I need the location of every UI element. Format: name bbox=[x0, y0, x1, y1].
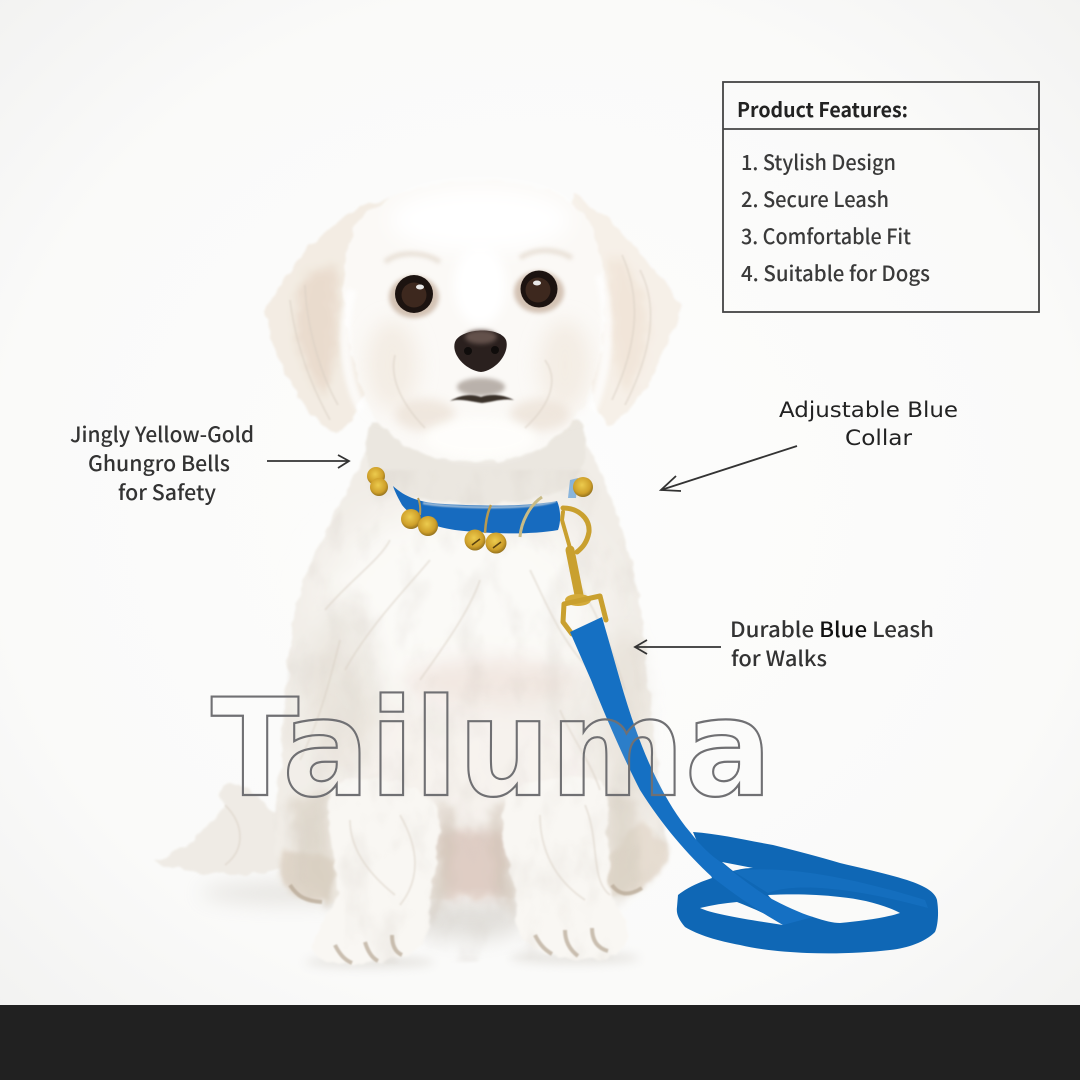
fur strokes bbox=[225, 255, 651, 905]
callout: leash bbox=[730, 614, 934, 673]
list: features: 4. Suitable for Dogs bbox=[741, 258, 930, 288]
list: features bbox=[741, 147, 930, 288]
dog tail bbox=[155, 783, 285, 875]
bells bbox=[367, 467, 593, 554]
floor shadow bbox=[200, 882, 640, 968]
list: features: 3. Comfortable Fit bbox=[741, 221, 911, 251]
list: features: 1. Stylish Design bbox=[741, 147, 896, 177]
watermark: Tailuma: Tailuma bbox=[211, 670, 772, 827]
dog hind paws bbox=[279, 850, 340, 902]
callout: leash: for Walks bbox=[731, 643, 827, 673]
panel: product features bbox=[723, 82, 1039, 312]
dog ears bbox=[265, 198, 392, 433]
dog neck bbox=[366, 420, 586, 504]
face shading bbox=[345, 188, 607, 458]
leash strap bbox=[570, 617, 813, 925]
arrow: collar bbox=[661, 446, 797, 491]
callout: bells: for Safety bbox=[118, 477, 217, 507]
dog nose and mouth bbox=[450, 330, 514, 403]
dog front legs bbox=[314, 778, 440, 965]
leash loop bbox=[677, 832, 938, 953]
callout: collar: Adjustable Blue bbox=[779, 398, 958, 422]
dog eyes bbox=[389, 270, 564, 318]
arrow: leash bbox=[635, 640, 721, 654]
callout: bells bbox=[70, 419, 254, 507]
arrow: bells bbox=[267, 455, 349, 468]
callout: collar bbox=[779, 398, 958, 450]
leash clip bbox=[562, 508, 606, 634]
list: features: 2. Secure Leash bbox=[741, 184, 889, 214]
dog body bbox=[274, 440, 668, 903]
leash upper strand sheen bbox=[733, 869, 928, 908]
dog fur silhouette bbox=[155, 180, 682, 965]
dog head bbox=[344, 180, 605, 462]
fur texture bbox=[274, 470, 668, 964]
callout: leash: Durable Blue Leash bbox=[730, 614, 934, 644]
collar bbox=[393, 478, 578, 537]
dog belly bbox=[438, 830, 510, 898]
callout: bells: Ghungro Bells bbox=[88, 448, 230, 478]
leg shadows bbox=[290, 790, 336, 910]
heading: product features: Product Features: bbox=[737, 94, 908, 123]
callout: collar: Collar bbox=[845, 426, 912, 450]
footer bar bbox=[0, 1005, 1080, 1080]
callout: bells: Jingly Yellow-Gold bbox=[70, 419, 254, 449]
dog photo illustration bbox=[155, 180, 938, 968]
paw details bbox=[290, 885, 642, 963]
